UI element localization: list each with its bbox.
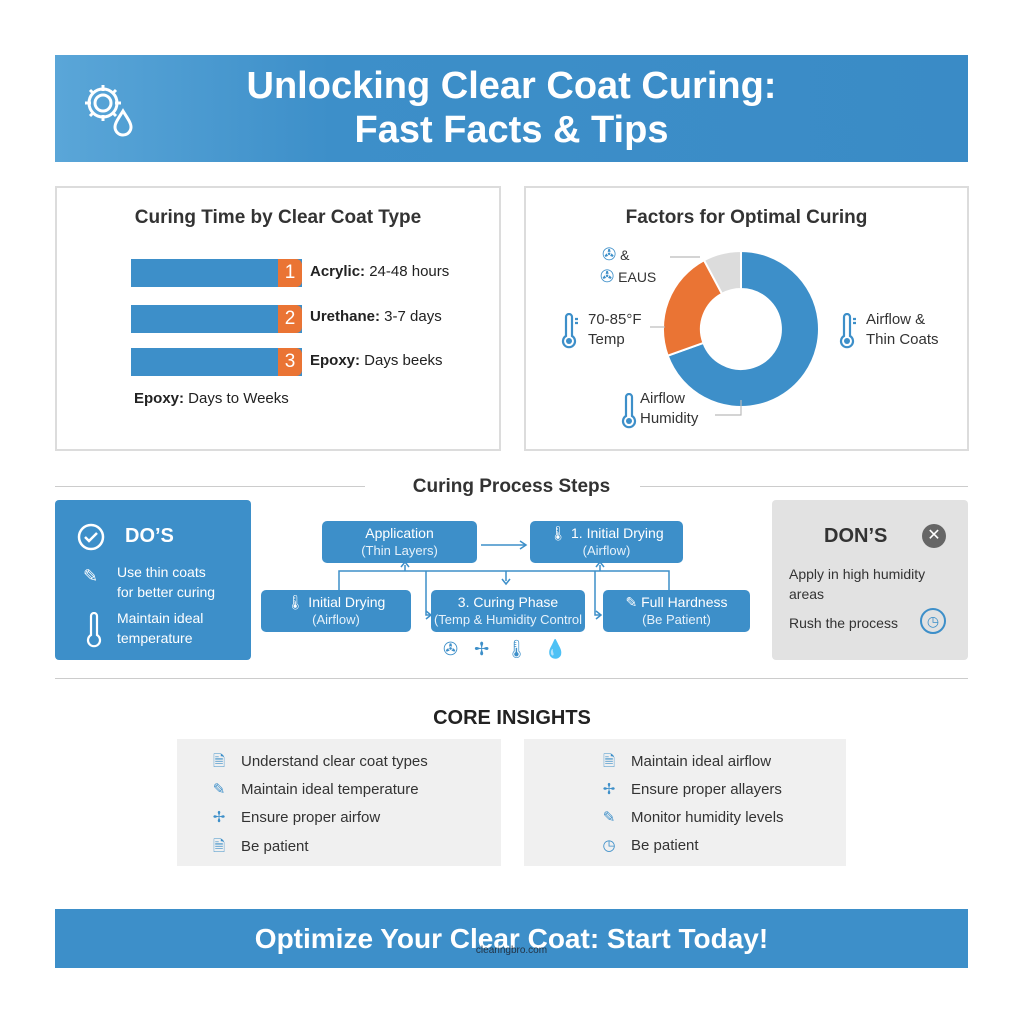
- panel: do's: temperature: [117, 630, 192, 646]
- panel: don'ts: ✕: [927, 527, 941, 544]
- panel: don'ts: [772, 500, 968, 660]
- insights box right: [524, 739, 846, 866]
- header banner: [55, 55, 968, 162]
- insights box right: ✢: [603, 781, 615, 798]
- panel heading: Factors for Optimal Curing: [626, 207, 867, 228]
- process flow: ✇✢🌡💧: [443, 639, 582, 659]
- panel: do's: DO’S: [125, 525, 174, 547]
- panel: factors: [524, 186, 969, 451]
- panel: don'ts: ◷: [927, 613, 939, 629]
- insights box right: ✎: [603, 809, 615, 826]
- donut labels: Airflow &: [866, 311, 925, 328]
- process flow: 🌡 Initial Drying: [287, 594, 385, 610]
- panel: do's: for better curing: [117, 584, 215, 600]
- insights box right: 🗎: [603, 753, 615, 770]
- insights box right: Monitor humidity levels: [631, 809, 784, 826]
- bar chart: Epoxy: Days beeks: [310, 352, 443, 369]
- donut labels: Airflow: [640, 390, 685, 407]
- bar chart: 1: [285, 262, 295, 283]
- insights box left: [177, 739, 501, 866]
- section heading: process: Curing Process Steps: [413, 476, 610, 497]
- insights box left: ✎: [213, 781, 225, 798]
- bar chart: Epoxy: Days to Weeks: [134, 390, 289, 407]
- insights box right: Maintain ideal airflow: [631, 753, 771, 770]
- donut labels: 70-85°F: [588, 311, 642, 328]
- bar chart: Acrylic: 24-48 hours: [310, 263, 449, 280]
- bar chart: [131, 259, 449, 407]
- process flow: ✎ Full Hardness: [626, 594, 728, 610]
- footer banner: Optimize Your Clear Coat: Start Today!: [255, 923, 768, 954]
- panel: don'ts: Apply in high humidity: [789, 566, 925, 582]
- insights box left: ✢: [213, 809, 225, 826]
- donut labels: Humidity: [640, 410, 698, 427]
- donut labels: Temp: [588, 331, 625, 348]
- process flow: (Airflow): [312, 612, 360, 627]
- insights box left: Understand clear coat types: [241, 753, 428, 770]
- panel: don'ts: Rush the process: [789, 615, 898, 631]
- bar chart: Urethane: 3-7 days: [310, 308, 442, 325]
- panel heading: Curing Time by Clear Coat Type: [135, 207, 421, 228]
- process flow: 3. Curing Phase: [458, 594, 558, 610]
- donut chart: [650, 252, 818, 416]
- panel: do's: Use thin coats: [117, 564, 206, 580]
- bar chart: 2: [285, 308, 295, 329]
- process flow: (Thin Layers): [361, 543, 438, 558]
- donut labels: ✇ EAUS: [600, 267, 656, 286]
- section heading: core insights: CORE INSIGHTS: [433, 707, 591, 729]
- process flow: (Be Patient): [642, 612, 711, 627]
- panel: don'ts: DON’S: [824, 525, 887, 547]
- donut labels: ✇ &: [602, 245, 629, 264]
- insights box right: ◷: [602, 837, 616, 854]
- process flow: (Temp & Humidity Control: [434, 612, 582, 627]
- footer banner: clearingbro.com: [476, 945, 547, 956]
- panel: do's: Maintain ideal: [117, 610, 203, 626]
- panel: do's: ✎: [83, 566, 98, 586]
- insights box left: Ensure proper airfow: [241, 809, 380, 826]
- bar chart: 3: [285, 351, 295, 372]
- icon: thermometer: [562, 313, 578, 348]
- footer banner: [55, 909, 968, 968]
- title: Fast Facts & Tips: [355, 109, 668, 151]
- donut labels: Thin Coats: [866, 331, 939, 348]
- process flow: Application: [365, 525, 434, 541]
- process flow: (Airflow): [583, 543, 630, 558]
- insights box left: Be patient: [241, 838, 309, 855]
- title: Unlocking Clear Coat Curing:: [247, 65, 776, 107]
- panel: do's: [55, 500, 251, 660]
- insights box left: Maintain ideal temperature: [241, 781, 419, 798]
- panel: don'ts: areas: [789, 586, 824, 602]
- title: [247, 65, 776, 151]
- process flow: [261, 521, 750, 659]
- insights box right: Be patient: [631, 837, 699, 854]
- insights box right: Ensure proper allayers: [631, 781, 782, 798]
- process flow: 🌡 1. Initial Drying: [549, 525, 664, 541]
- insights box left: 🗎: [213, 838, 225, 855]
- icon: gear and drop: [85, 85, 132, 136]
- insights box left: 🗎: [213, 753, 225, 770]
- donut labels: [562, 245, 939, 428]
- panel: curing time: [55, 186, 501, 451]
